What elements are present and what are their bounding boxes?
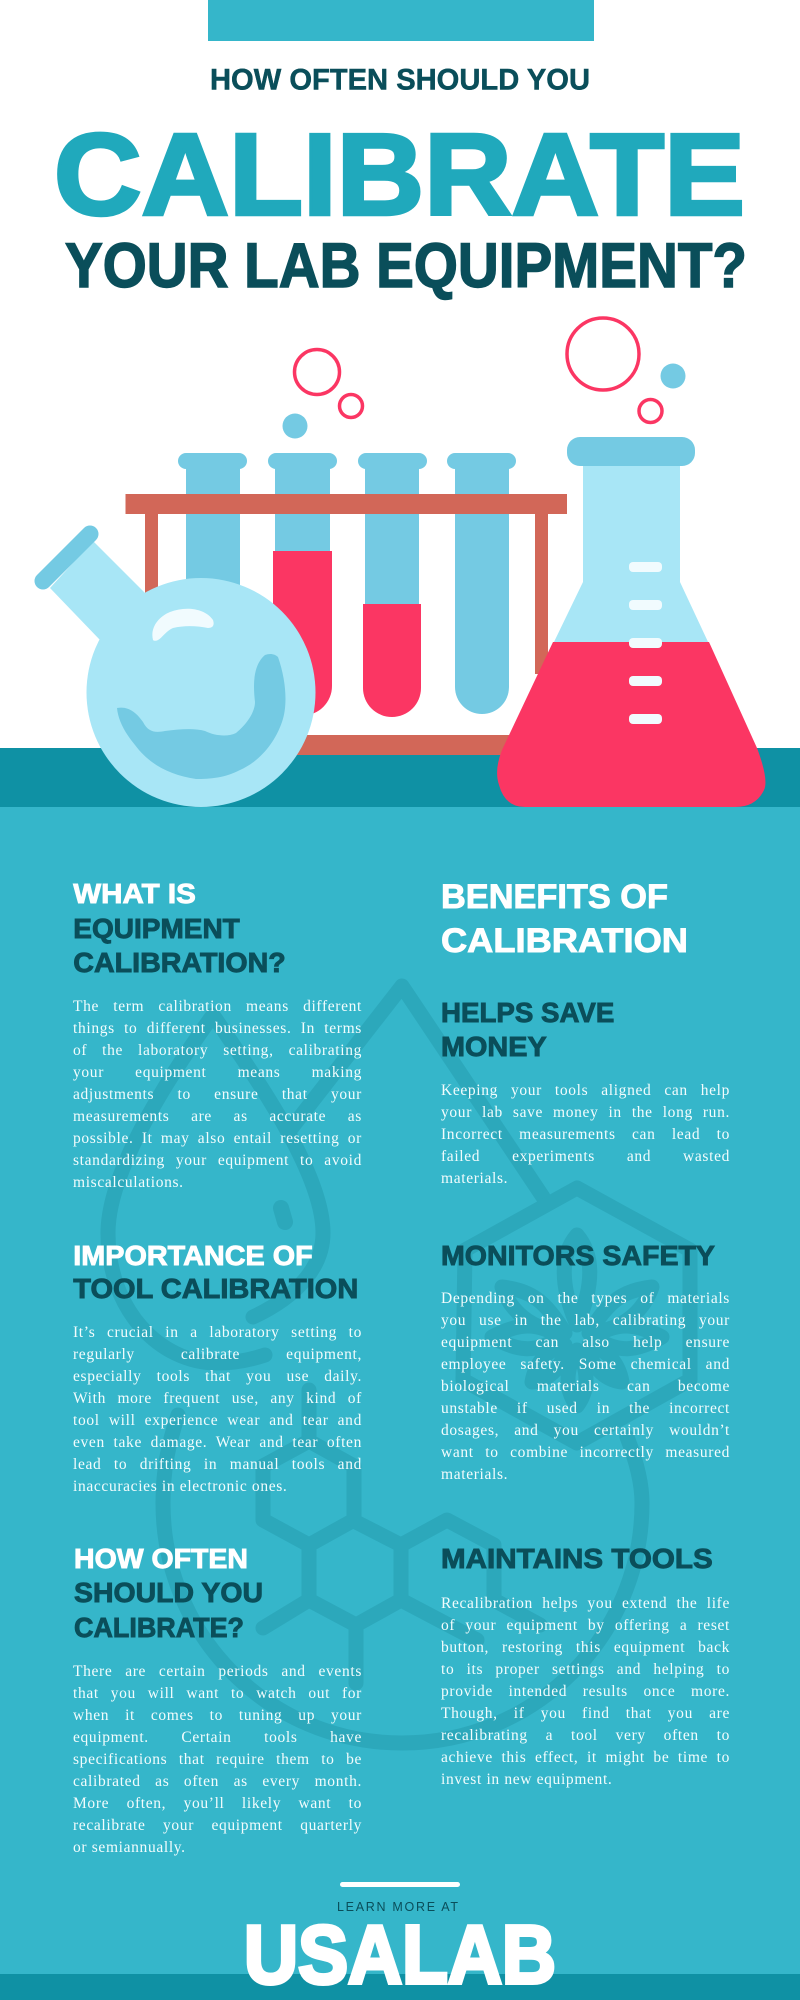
body text: materials. [441, 1466, 508, 1483]
body text: tool will experience wear and tear and [73, 1412, 362, 1428]
body text: equipment. Certain tools have [73, 1729, 362, 1746]
red liquid in test tubes [273, 551, 421, 717]
body text: possible. It may also entail resetting or [73, 1130, 362, 1147]
body text: that you will want to watch out for [73, 1685, 362, 1702]
body text: measurements are as accurate as [73, 1108, 362, 1125]
body text: With more frequent use, any kind of [73, 1390, 362, 1406]
body text [441, 1290, 730, 1483]
body text: button, restoring this equipment back [441, 1639, 730, 1656]
heading: benefits of calibration: BENEFITS OF [441, 878, 668, 916]
test tube rack [126, 494, 567, 755]
body text: There are certain periods and events [73, 1663, 362, 1680]
body text: employee safety. Some chemical and [441, 1356, 730, 1373]
body text: to its proper settings and helping to [441, 1661, 730, 1678]
body text: you use in the lab, calibrating your [441, 1312, 730, 1329]
bubbles above conical flask [567, 318, 686, 422]
body text: when it comes to tuning up your [73, 1707, 362, 1724]
divider bar [340, 1882, 460, 1887]
heading: MONITORS SAFETY [441, 1240, 715, 1271]
title line: calibrate: CALIBRATE [54, 110, 745, 240]
top banner bar [208, 0, 594, 41]
body text: It’s crucial in a laboratory setting to [73, 1324, 362, 1340]
section: how often should you calibrate [73, 1543, 362, 1856]
test tubes [178, 453, 516, 714]
body text: invest in new equipment. [441, 1771, 612, 1788]
body text [73, 1663, 362, 1856]
heading: HOW OFTEN [74, 1543, 248, 1574]
body text: biological materials can become [441, 1378, 730, 1395]
body text: recalibrating a tool very often to [441, 1727, 730, 1744]
body text: provide intended results once more. [441, 1683, 730, 1700]
heading: IMPORTANCE OF [73, 1240, 313, 1271]
section: monitors safety [441, 1240, 730, 1483]
title line: how often should you: HOW OFTEN SHOULD YOU [210, 64, 590, 96]
heading: benefits of calibration [441, 878, 688, 960]
heading [72, 878, 286, 978]
body text: calibrated as often as every month. [73, 1773, 362, 1790]
body text: want to combine incorrectly measured [441, 1444, 730, 1461]
body text: even take damage. Wear and tear often [73, 1434, 362, 1450]
heading: MAINTAINS TOOLS [441, 1543, 713, 1574]
heading: SHOULD YOU [74, 1577, 263, 1608]
body text: unstable if used in the incorrect [441, 1400, 730, 1417]
heading: WHAT IS [73, 878, 196, 909]
body text: or semiannually. [73, 1839, 186, 1856]
heading: CALIBRATION? [73, 947, 286, 978]
body text: dosages, and you certainly wouldn’t [441, 1422, 730, 1439]
body text: failed experiments and wasted [441, 1148, 730, 1165]
body text: specifications that require them to be [73, 1751, 362, 1768]
body text: achieve this effect, it might be time to [441, 1749, 730, 1766]
body text: miscalculations. [73, 1174, 184, 1191]
heading [73, 1240, 358, 1304]
heading: EQUIPMENT [73, 913, 240, 944]
heading: MONEY [441, 1031, 547, 1062]
conical flask [497, 437, 765, 807]
body text: materials. [441, 1170, 508, 1187]
body text [441, 1082, 730, 1187]
body text: especially tools that you use daily. [73, 1368, 362, 1384]
body text: More often, you’ll likely want to [73, 1795, 362, 1812]
body text: things to different businesses. In terms [73, 1020, 362, 1037]
body text: adjustments to ensure that your [73, 1086, 362, 1103]
body text: of the laboratory setting, calibrating [73, 1042, 362, 1059]
heading: HELPS SAVE [441, 997, 614, 1028]
bubbles above test tubes [282, 350, 362, 438]
round flask [43, 534, 316, 807]
body text: Though, if you find that you are [441, 1705, 730, 1722]
body text [73, 1324, 362, 1494]
body text: your lab save money in the long run. [441, 1104, 730, 1121]
body text: lead to drifting in manual tools and [73, 1456, 362, 1472]
body text: recalibrate your equipment quarterly [73, 1817, 362, 1834]
body text: equipment can also help ensure [441, 1334, 730, 1351]
body text: regularly calibrate equipment, [73, 1346, 362, 1362]
footer call to action [244, 1882, 556, 1990]
heading [441, 997, 614, 1062]
learn more label: LEARN MORE AT [337, 1900, 458, 1914]
lab illustration [34, 316, 766, 807]
section: what is equipment calibration [72, 878, 362, 1191]
body text: of your equipment by offering a reset [441, 1617, 730, 1634]
heading: TOOL CALIBRATION [73, 1273, 358, 1304]
heading [74, 1543, 263, 1643]
title [54, 64, 747, 301]
body text: Depending on the types of materials [441, 1290, 730, 1307]
body text [441, 1595, 730, 1788]
heading: CALIBRATE? [74, 1612, 244, 1643]
section: maintains tools [441, 1543, 730, 1788]
body text: inaccuracies in electronic ones. [73, 1478, 287, 1494]
body text: standardizing your equipment to avoid [73, 1152, 362, 1169]
section: importance of tool calibration [73, 1240, 362, 1494]
body text [73, 998, 362, 1191]
body text: Keeping your tools aligned can help [441, 1082, 730, 1099]
body text: The term calibration means different [73, 998, 362, 1015]
body text: Incorrect measurements can lead to [441, 1126, 730, 1143]
heading: benefits of calibration: CALIBRATION [441, 922, 688, 960]
body text: your equipment means making [73, 1064, 362, 1081]
body text: Recalibration helps you extend the life [441, 1595, 730, 1612]
section: helps save money [441, 997, 730, 1187]
